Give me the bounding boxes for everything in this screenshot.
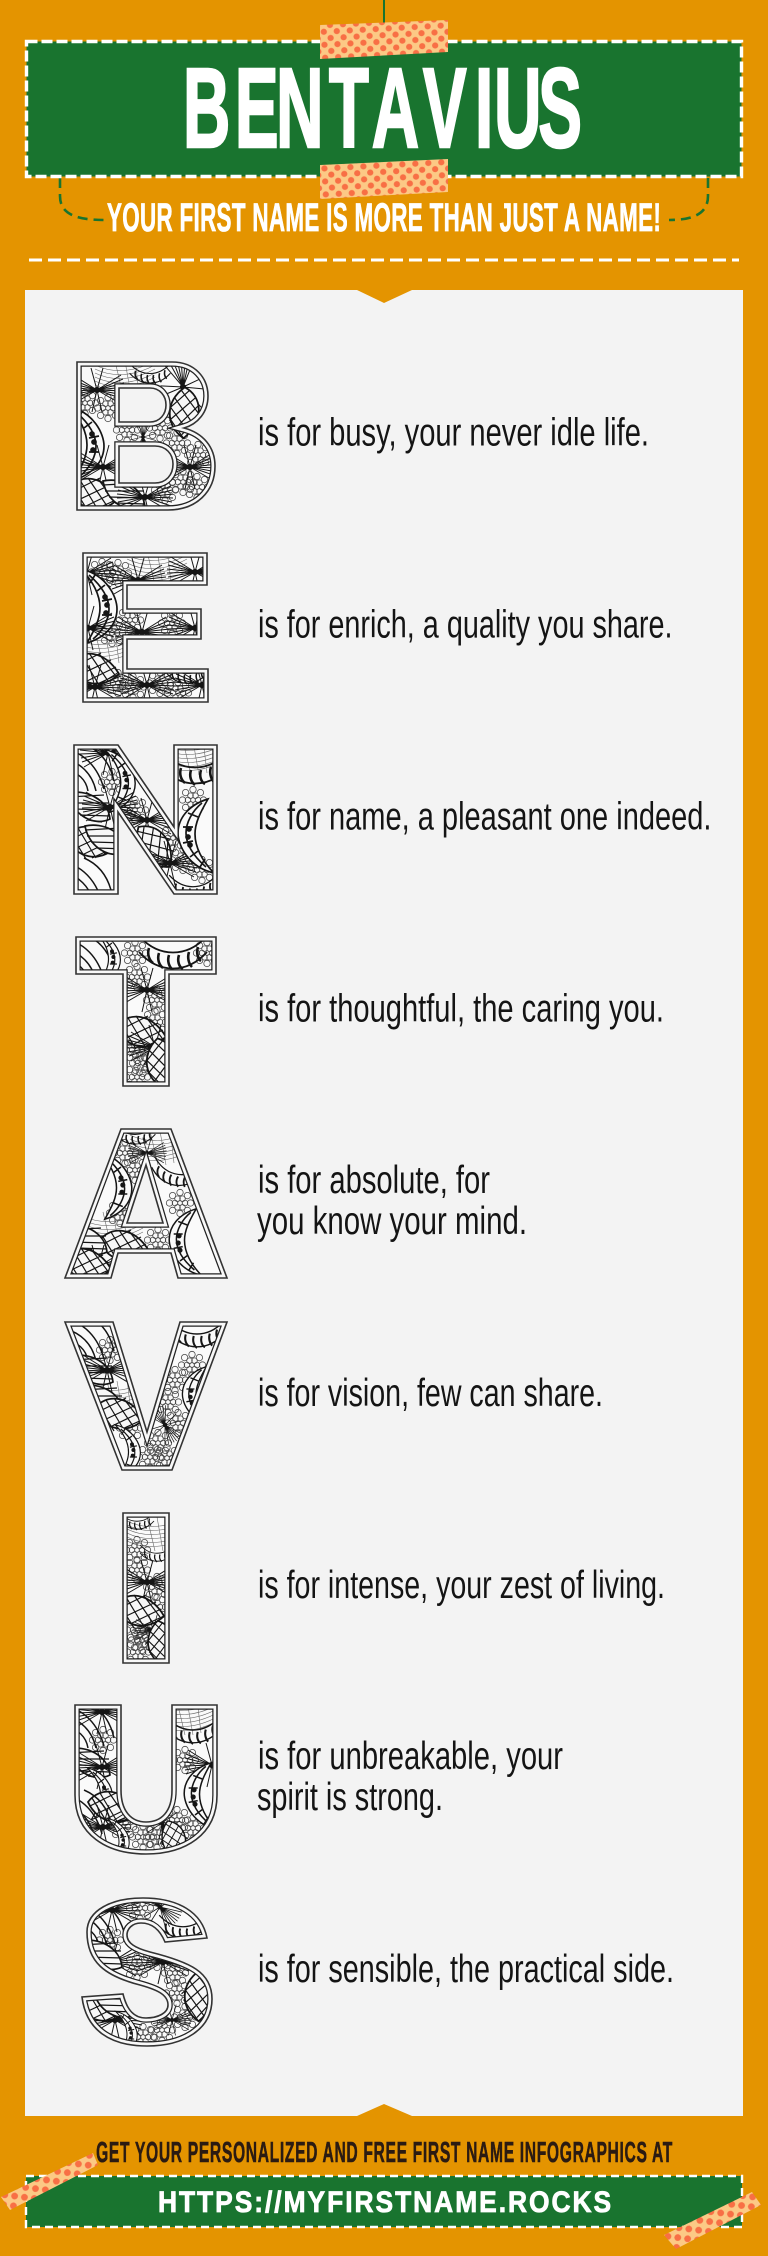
text row B: is for busy, your never idle life. xyxy=(258,412,649,454)
top notch xyxy=(357,290,412,303)
title: BENTAVIUS xyxy=(183,44,582,171)
letter I xyxy=(122,1512,170,1664)
footer call to action: GET YOUR PERSONALIZED AND FREE FIRST NAME INFOGRAPHICS AT xyxy=(96,2136,672,2168)
letter T xyxy=(75,936,217,1087)
footer tape right xyxy=(664,2192,761,2249)
bottom notch xyxy=(357,2104,412,2116)
text row U: is for unbreakable, your xyxy=(258,1735,563,1778)
right dashed bracket xyxy=(669,178,708,220)
bottom tape xyxy=(320,159,448,199)
letter A xyxy=(61,1125,227,1289)
left dashed bracket xyxy=(60,178,105,220)
letter B xyxy=(76,361,216,511)
header green hanging line xyxy=(383,0,385,26)
letter E xyxy=(82,552,209,703)
text row A xyxy=(257,1159,527,1243)
dashed divider xyxy=(29,258,739,262)
text row U xyxy=(257,1735,563,1819)
text row A: is for absolute, for xyxy=(258,1159,490,1202)
text row A: you know your mind. xyxy=(257,1200,527,1243)
text row V: is for vision, few can share. xyxy=(258,1372,603,1415)
letter V xyxy=(65,1315,227,1477)
footer banner xyxy=(26,2176,742,2227)
letter N xyxy=(73,744,218,895)
footer tape left xyxy=(1,2153,98,2210)
title banner xyxy=(26,42,742,176)
text row U: spirit is strong. xyxy=(257,1776,443,1819)
letter U xyxy=(74,1704,218,1855)
letter S xyxy=(81,1897,213,2047)
footer url: HTTPS://MYFIRSTNAME.ROCKS xyxy=(158,2184,611,2218)
subtitle: YOUR FIRST NAME IS MORE THAN JUST A NAME! xyxy=(107,195,661,240)
main panel xyxy=(25,290,743,2116)
top tape xyxy=(320,20,448,59)
